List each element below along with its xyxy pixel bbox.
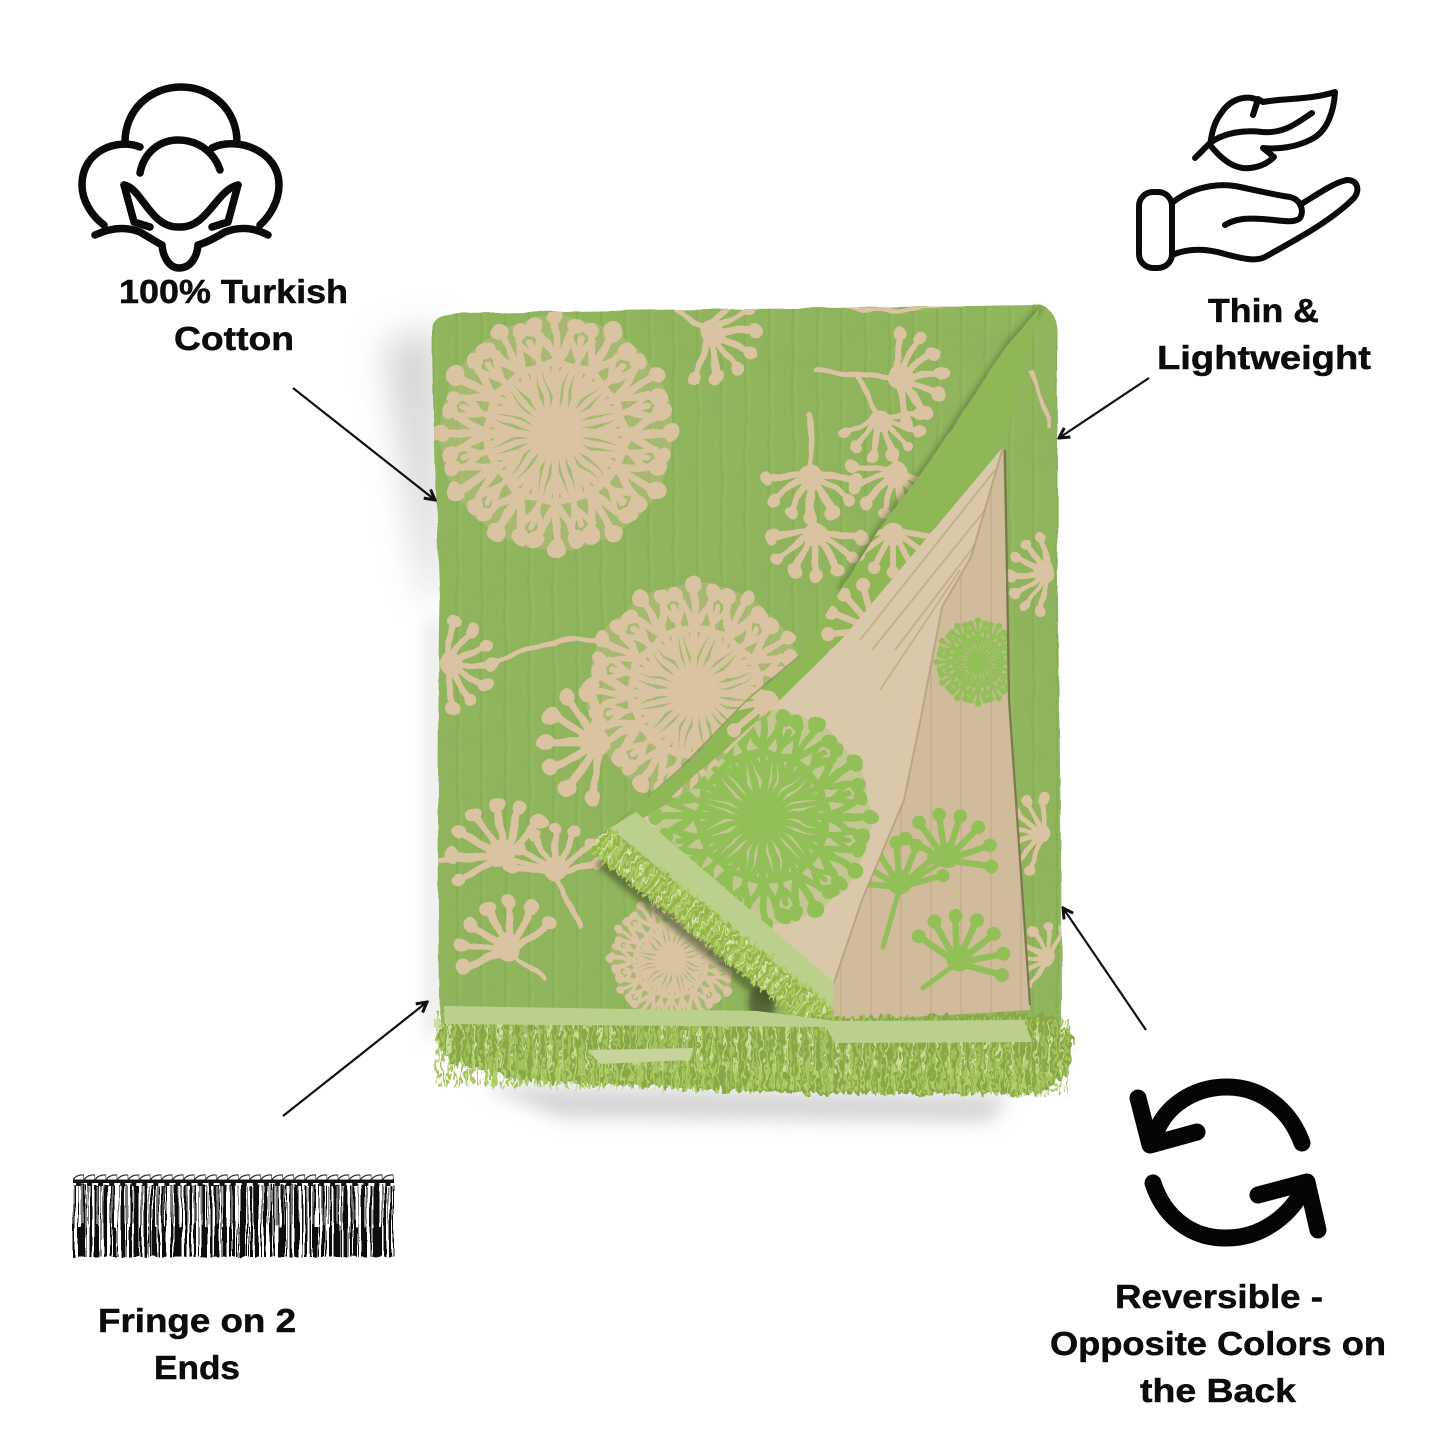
arrow to blanket right edge: [1059, 378, 1149, 438]
arrow to blanket left edge: [293, 388, 435, 500]
label: Thin & Lightweight: Thin &: [1208, 292, 1319, 329]
fabric mottling: [432, 310, 1058, 920]
label: 100% Turkish Cotton: 100% Turkish: [119, 273, 348, 310]
sprigs upper right: [816, 370, 896, 470]
sprigs centre: [809, 413, 816, 530]
lower layer hem: [588, 1048, 693, 1064]
blanket shadow: [385, 325, 1010, 1122]
label: Thin & Lightweight: Lightweight: [1157, 339, 1371, 376]
green sprigs on reverse: [868, 617, 1010, 990]
folded flap: tan face with green dandelion: [635, 447, 1003, 1000]
flap crinkles: [860, 470, 995, 690]
icon: cotton boll: [82, 87, 279, 268]
large dandelion top left: [430, 307, 682, 559]
icon: leaf over hand: [1139, 92, 1357, 268]
fold shadow line: [840, 308, 1040, 590]
flap hem: [610, 812, 834, 1012]
sprig with curved stem: [498, 636, 596, 663]
flap fringe shadow: [600, 860, 776, 1021]
blanket body: green face: [432, 305, 1062, 1030]
bottom hem: [444, 1006, 1032, 1043]
flap fringe: [598, 838, 826, 1022]
arrow to fringe: [283, 1002, 427, 1116]
fringe section: [73, 1002, 427, 1386]
reverse tan layer: [828, 447, 1030, 1022]
sprigs top: [674, 306, 950, 328]
folded flap: green band: [600, 308, 1040, 838]
icon: reversible arrows: [1138, 1087, 1318, 1238]
label: Reversible - Opposite Colors on the Back: Reversible -: [1115, 1278, 1323, 1315]
folded blanket photo: [420, 281, 1080, 1094]
label: Fringe on 2 Ends: [98, 1302, 296, 1386]
sprigs on right strip: [1030, 370, 1048, 430]
tan motifs on band: [727, 522, 932, 738]
label: Fringe on 2 Ends: Fringe on 2: [98, 1302, 296, 1339]
sprigs lower left: [437, 857, 580, 978]
reversible section: [1050, 908, 1386, 1409]
large dandelion centre: [578, 575, 812, 809]
arrow to reverse side: [1063, 908, 1146, 1030]
label: Reversible - Opposite Colors on the Back: [1050, 1278, 1386, 1409]
label: Fringe on 2 Ends: Ends: [154, 1349, 240, 1386]
label: Reversible - Opposite Colors on the Back: Opposite Colors on: [1050, 1325, 1386, 1362]
label: Reversible - Opposite Colors on the Back: the Back: [1140, 1372, 1297, 1409]
bottom fringe: [433, 1015, 1072, 1094]
dandelion pattern on green face: [422, 281, 1073, 1027]
flap dandelion: [646, 700, 880, 934]
icon: fringe trim: [73, 1172, 394, 1242]
lightweight section: [1059, 92, 1371, 438]
label: 100% Turkish Cotton: Cotton: [174, 320, 294, 357]
cotton section: [82, 87, 435, 500]
partly hidden dandelion bottom: [606, 901, 734, 1010]
label: 100% Turkish Cotton: [119, 273, 348, 357]
label: Thin & Lightweight: [1157, 292, 1371, 376]
right green strip edge: [1005, 450, 1030, 1005]
